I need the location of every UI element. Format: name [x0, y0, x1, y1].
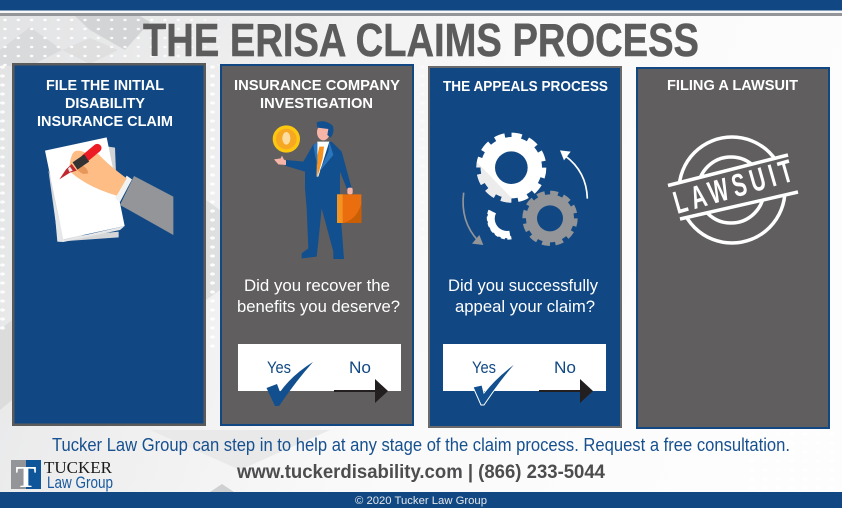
icon: lawsuit stamp	[668, 137, 798, 243]
yes/no box	[443, 344, 606, 405]
panel 3 question: appeal your claim?	[455, 297, 595, 316]
panel: file the initial claim	[13, 64, 205, 425]
footer bar: © 2020 Tucker Law Group	[355, 495, 487, 507]
panel 2 heading: INVESTIGATION	[260, 95, 373, 112]
logo: Tucker Law Group: T	[16, 459, 37, 494]
icon: businessman with coin and briefcase	[273, 121, 361, 259]
icon: hand writing on paper	[45, 137, 173, 242]
contact line: www.tuckerdisability.com | (866) 233-5044	[236, 462, 605, 483]
icon: arrow	[539, 379, 593, 403]
panel 1 heading: INSURANCE CLAIM	[37, 113, 173, 130]
panel 3 heading: THE APPEALS PROCESS	[443, 78, 608, 95]
yes/no box: Yes	[267, 358, 291, 377]
panel 2 heading: INSURANCE COMPANY	[234, 77, 400, 94]
panel 1 heading: DISABILITY	[65, 95, 145, 112]
icon: gears and arrows	[463, 135, 587, 247]
background	[0, 16, 480, 492]
yes/no box: Yes	[472, 358, 496, 377]
panel 2 question: Did you recover the	[244, 276, 390, 295]
panel 1 heading: FILE THE INITIAL	[46, 77, 164, 94]
panel 2 question: benefits you deserve?	[237, 297, 400, 316]
panel 1 heading	[37, 77, 173, 130]
icon: check mark	[266, 362, 313, 406]
icon: lawsuit stamp: LAWSUIT	[669, 153, 797, 221]
panel: filing a lawsuit	[637, 68, 829, 428]
logo: Tucker Law Group	[11, 458, 113, 494]
yes/no box	[238, 344, 401, 406]
panel 3 question	[448, 276, 598, 316]
yes/no box: No	[349, 358, 371, 377]
call to action text: Tucker Law Group can step in to help at any stage of the claim process. Request a free consultation.	[52, 435, 790, 455]
icon: check mark	[473, 362, 517, 405]
panel 3 question: Did you successfully	[448, 276, 598, 295]
panel: the appeals process	[429, 67, 621, 427]
top banner	[0, 0, 842, 16]
yes/no box: No	[554, 358, 576, 377]
icon: arrow	[334, 379, 388, 403]
panel 2 question	[237, 276, 400, 316]
logo: Tucker Law Group: Law Group	[47, 473, 113, 492]
panel 2 heading	[234, 77, 400, 112]
panel 4 heading: FILING A LAWSUIT	[667, 77, 798, 94]
panel: insurance company investigation	[221, 65, 413, 425]
title: THE ERISA CLAIMS PROCESS	[143, 14, 699, 66]
logo: Tucker Law Group: TUCKER	[44, 458, 113, 477]
footer bar	[0, 492, 842, 508]
